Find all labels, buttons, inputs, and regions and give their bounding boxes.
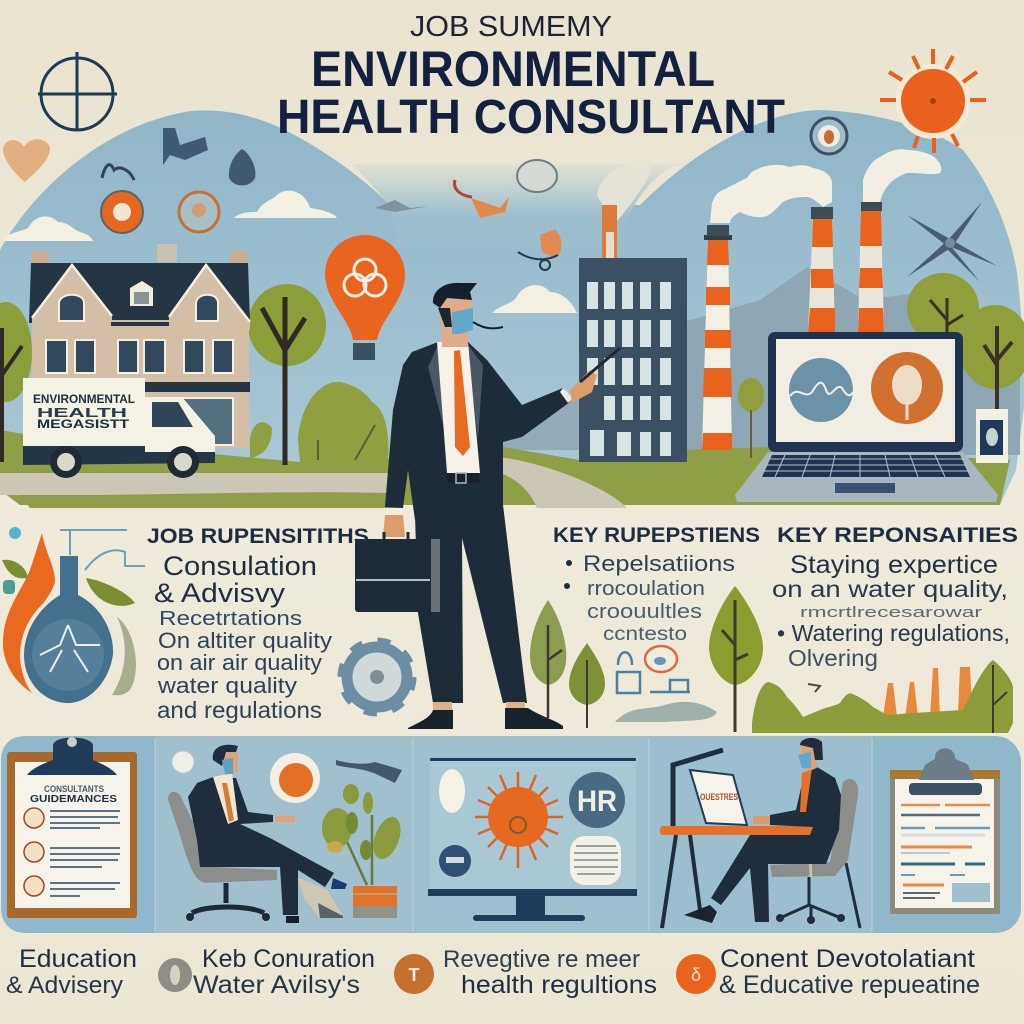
trees right (738, 273, 1024, 458)
panel: right text: rmcrtlrecesarowar (800, 604, 982, 621)
panel: right text: KEY REPONSAITIES (777, 524, 1018, 547)
laptop (735, 332, 1008, 502)
caption: content development: Conent Devotolatiant (720, 945, 975, 973)
delivery van: ENVIRONMENTAL (33, 392, 135, 406)
panel: left text: & Advisvy (154, 578, 286, 608)
caption: revegetative (394, 946, 657, 999)
bottom panels background (1, 736, 1021, 933)
icon: biohazard bulb (325, 235, 405, 360)
panel: clipboard left: CONSULTANTS (44, 784, 104, 794)
office building (579, 205, 687, 462)
delivery van (23, 378, 215, 478)
title: HEALTH CONSULTANT (277, 91, 785, 144)
landscape with orange spikes (752, 660, 1013, 733)
panel: left text: on air air quality (157, 650, 322, 675)
caption: education: & Advisery (6, 972, 123, 999)
trees left (0, 284, 388, 465)
panel: desk consultant: OUESTRES (700, 792, 738, 802)
caption: education: Education (19, 945, 137, 973)
caption: revegetative: Revegtive re meer (443, 946, 640, 973)
icon: compass crosshair (38, 52, 117, 131)
panel: middle text: KEY RUPEPSTIENS (553, 524, 760, 547)
smokestacks with smoke (702, 149, 941, 450)
panel: desk consultant (660, 738, 860, 928)
caption: content development (676, 945, 980, 999)
panel: left text: Consulation (163, 551, 317, 581)
panel: middle text: rrocoulation (587, 578, 705, 600)
panel: left text: On altiter quality (158, 628, 332, 653)
panel: left text: water quality (157, 673, 297, 698)
delivery van: HEALTH (37, 405, 127, 420)
panel: right text (772, 524, 1018, 671)
house (29, 244, 250, 448)
caption: content development: δ (691, 965, 701, 985)
panel: right text: on an water quality, (772, 576, 1008, 602)
icon: heart (3, 139, 50, 182)
panel: left text (147, 525, 369, 723)
icon: gear (341, 641, 413, 713)
caption: education (6, 945, 137, 999)
caption: revegetative: health regultions (461, 971, 657, 999)
caption: content development: & Educative repueatine (719, 971, 980, 999)
panel: middle text: Repelsatiions (583, 551, 735, 576)
panel: right text: • Watering regulations, (777, 620, 1010, 646)
caption: key consultation (158, 945, 375, 999)
panel: left text: JOB RUPENSITITHS (147, 525, 369, 548)
bottom captions (6, 945, 980, 999)
caption: key consultation: Water Avilsy's (193, 971, 360, 999)
panel: right text: Staying expertice (790, 551, 998, 579)
title (277, 11, 785, 144)
sky and hills backdrop (0, 110, 1024, 508)
wind turbine (907, 202, 997, 282)
panel: plant (322, 784, 406, 918)
floating icons in sky (101, 118, 847, 270)
panel: seated consultant (168, 745, 402, 923)
panel: clipboard left (7, 737, 137, 918)
clouds (3, 191, 577, 313)
briefcase (355, 532, 440, 612)
panel: right text: Olvering (788, 645, 878, 671)
panel: clipboard left: GUIDEMANCES (30, 794, 117, 805)
delivery van: MEGASISTT (37, 417, 130, 431)
title: ENVIRONMENTAL (311, 41, 715, 97)
small trees and icons middle (530, 586, 763, 732)
panel: left text: and regulations (157, 697, 322, 723)
icon: flask with leaves (2, 527, 145, 706)
panel: virus monitor (428, 758, 637, 921)
caption: revegetative: T (408, 965, 420, 985)
panel: clipboard right (890, 748, 1000, 914)
icon: sun (880, 49, 986, 153)
panel: middle text (553, 524, 760, 645)
caption: key consultation: Keb Conuration (202, 945, 375, 973)
title: JOB SUMEMY (410, 11, 612, 43)
panel: virus monitor: HR (577, 785, 617, 818)
panel: middle text: croouultles (587, 601, 702, 623)
consultant figure (383, 283, 620, 729)
panel: left text: Recetrtations (159, 608, 302, 630)
panel: middle text: ccntesto (603, 624, 687, 645)
